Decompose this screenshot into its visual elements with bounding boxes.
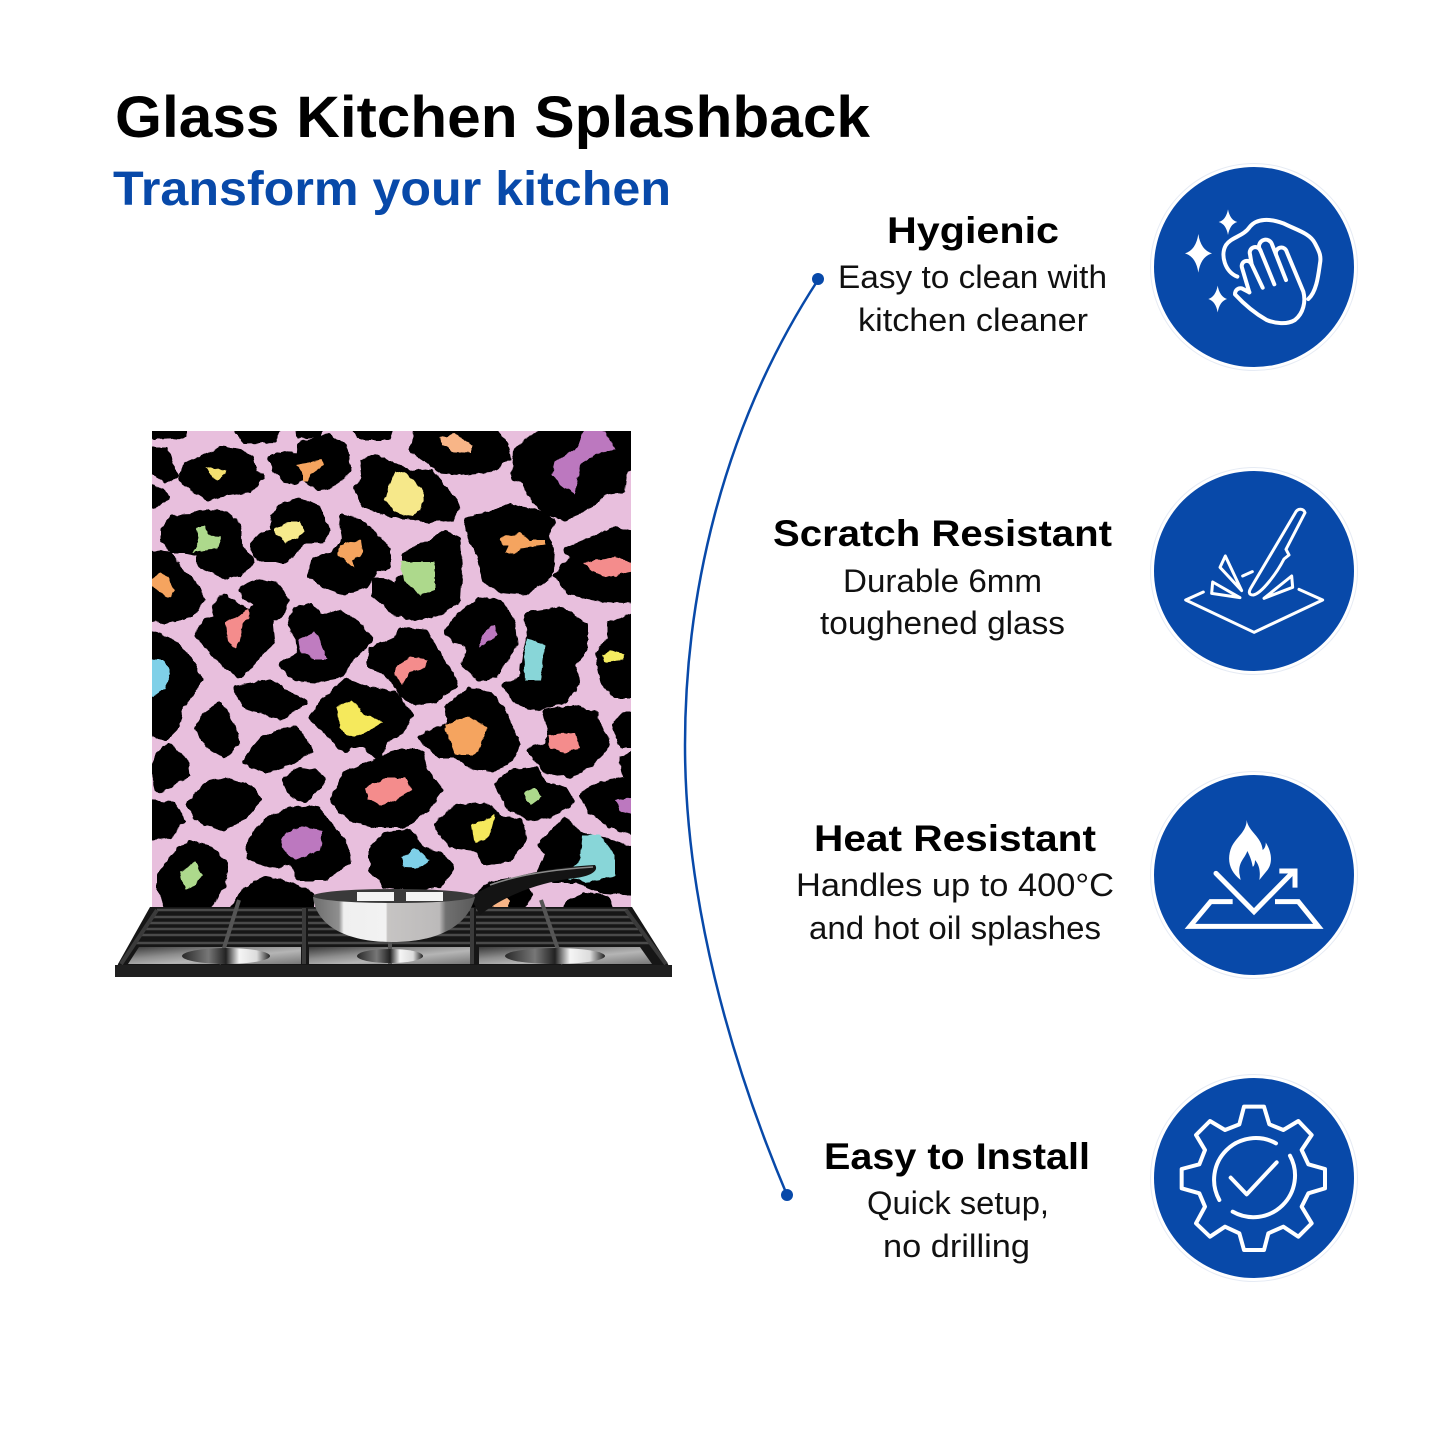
feature: hygienic: kitchen cleaner: [858, 302, 1088, 338]
subtitle: Transform your kitchen: [113, 163, 671, 216]
icon: gear with check mark: [1150, 1074, 1358, 1282]
splashback: pastel leopard print glass: [148, 425, 636, 912]
feature: heat resistant: Handles up to 400°C: [796, 867, 1114, 903]
panel: splashback and hob product image: [115, 425, 672, 977]
feature: scratch resistant: [773, 513, 1112, 641]
title: Glass Kitchen Splashback: [115, 85, 871, 150]
feature: heat resistant: [796, 818, 1114, 946]
feature: heat resistant: Heat Resistant: [814, 818, 1096, 859]
feature: scratch resistant: toughened glass: [820, 605, 1065, 641]
curved connector line with end dots: [685, 273, 824, 1201]
infographic: [114, 94, 1358, 1282]
feature: easy to install: Quick setup,: [867, 1185, 1049, 1221]
feature: scratch resistant: Durable 6mm: [843, 563, 1042, 599]
feature: scratch resistant: Scratch Resistant: [773, 513, 1112, 554]
feature: heat resistant: and hot oil splashes: [809, 910, 1101, 946]
feature: easy to install: Easy to Install: [824, 1136, 1090, 1177]
feature: easy to install: [824, 1136, 1090, 1264]
feature: easy to install: no drilling: [883, 1228, 1030, 1264]
feature: hygienic: Hygienic: [887, 210, 1059, 251]
icon: hand wiping with sparkles: [1150, 164, 1358, 370]
frying pan: [313, 865, 596, 942]
icon: knife on glass surface: [1150, 468, 1358, 674]
feature: hygienic: Easy to clean with: [838, 259, 1107, 295]
gas hob: [115, 900, 672, 977]
feature: hygienic: [838, 210, 1107, 338]
icon: flame over surface with arrow: [1150, 772, 1358, 978]
